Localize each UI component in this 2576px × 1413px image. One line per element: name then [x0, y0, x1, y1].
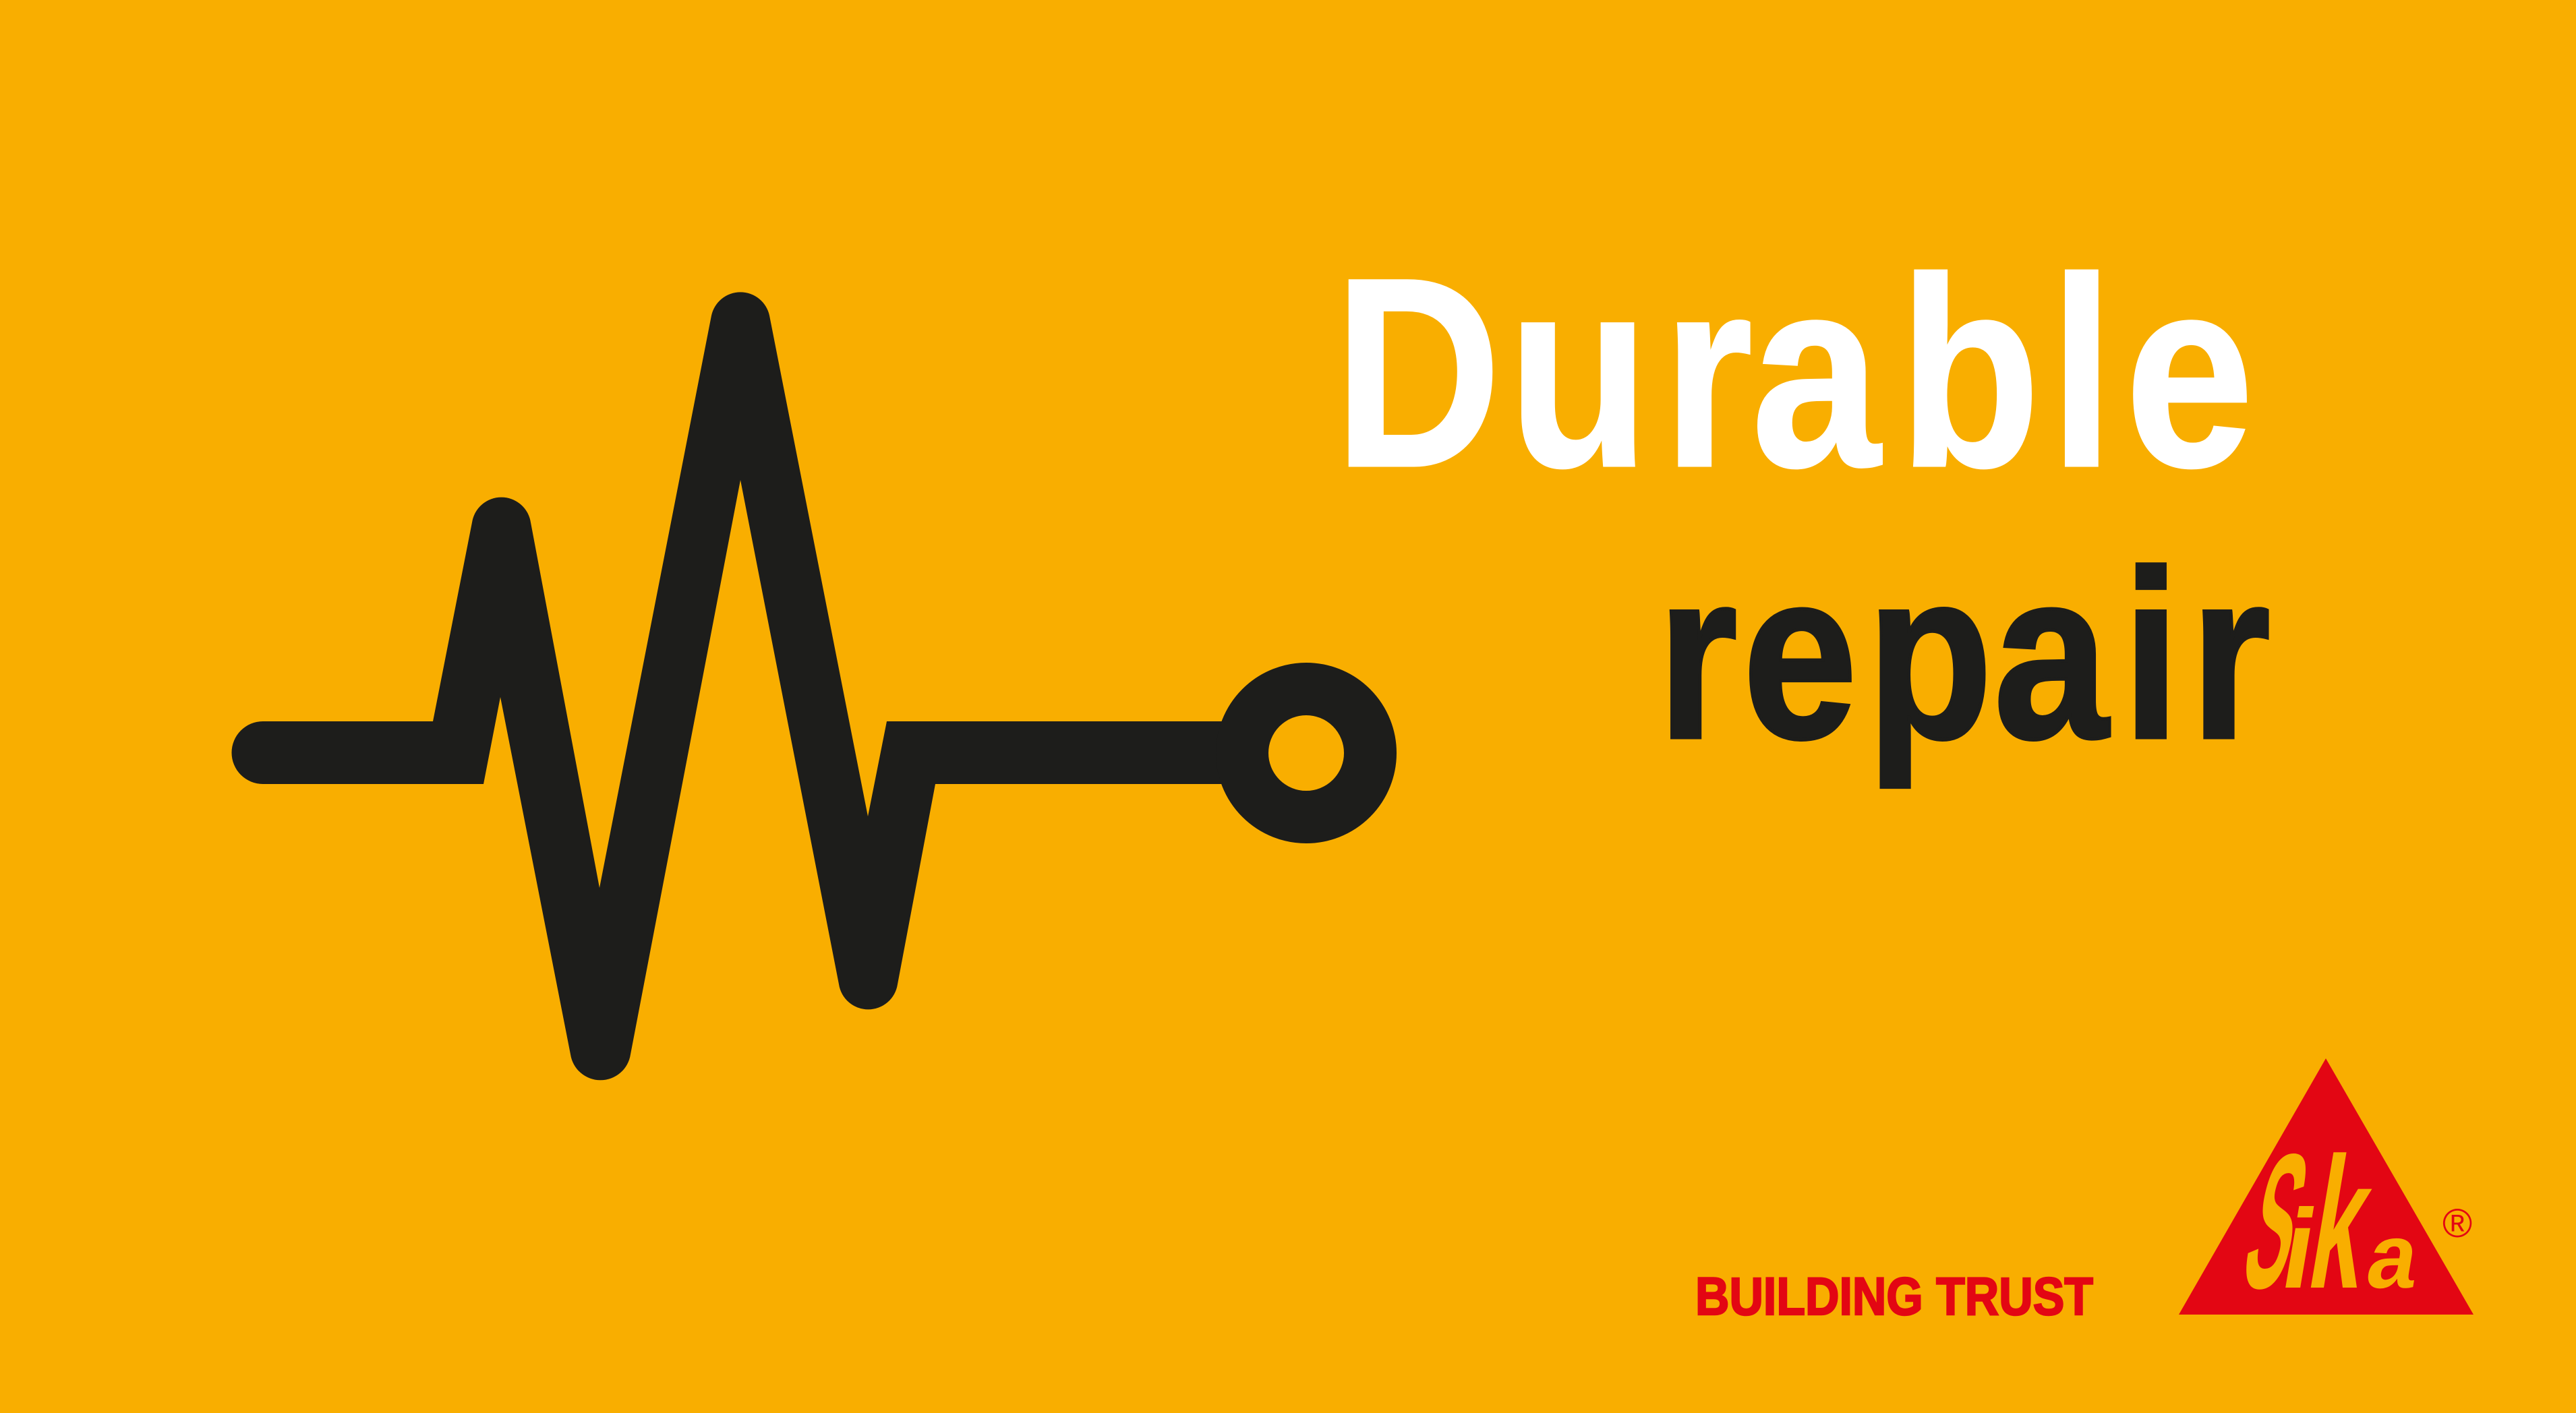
- logo triangle: [2179, 1058, 2473, 1315]
- logo wordmark: k: [2297, 1119, 2385, 1328]
- heading: repair: repair: [1658, 521, 2271, 790]
- registered mark: ®: [2442, 1201, 2472, 1246]
- heading: Durable: Durable: [1334, 222, 2254, 524]
- logo: Sika triangle: [2179, 1058, 2473, 1329]
- logo wordmark: S: [2227, 1114, 2326, 1329]
- tagline: building trust: BUILDING TRUST: [1695, 1266, 2093, 1326]
- logo wordmark: i: [2274, 1186, 2325, 1311]
- logo wordmark: a: [2360, 1205, 2427, 1307]
- icon: pulse line ending in ring: [231, 292, 1370, 1080]
- logo wordmark: [2227, 1114, 2427, 1329]
